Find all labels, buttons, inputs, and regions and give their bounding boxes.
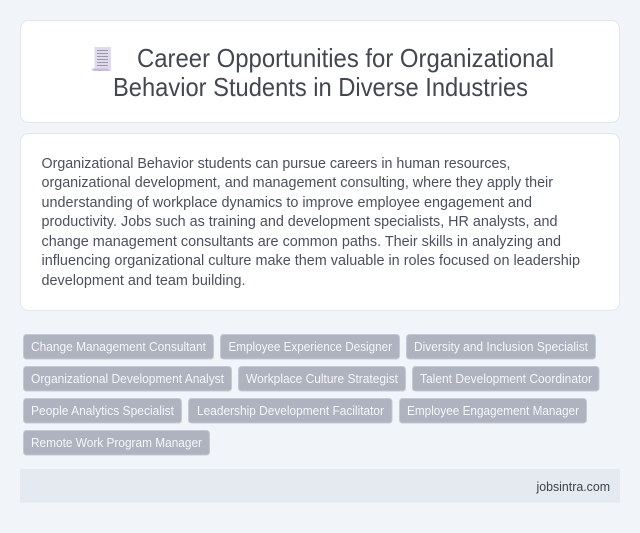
job tags <box>24 334 599 455</box>
description text: influencing organizational culture make them valuable in roles focused on leadership <box>42 253 580 269</box>
tag: Employee Experience Designer <box>220 334 400 359</box>
tag: Diversity and Inclusion Specialist <box>406 334 596 359</box>
tag: Employee Engagement Manager <box>400 398 586 423</box>
tag: Workplace Culture Strategist: Workplace Culture Strategist <box>246 372 398 386</box>
tag: People Analytics Specialist <box>24 398 182 423</box>
footer bar <box>20 469 620 502</box>
description text <box>42 156 580 289</box>
description panel <box>20 134 620 310</box>
tag: Talent Development Coordinator: Talent Development Coordinator <box>420 372 592 386</box>
tag: Change Management Consultant <box>24 334 214 359</box>
title: Career Opportunities for Organizational <box>137 43 554 73</box>
footer source: jobsintra.com <box>536 480 610 494</box>
title <box>113 43 554 102</box>
description text: Organizational Behavior students can pursue careers in human resources, <box>42 156 510 172</box>
tag: Diversity and Inclusion Specialist: Diversity and Inclusion Specialist <box>414 340 588 354</box>
tag: Remote Work Program Manager <box>24 430 210 455</box>
description text: organizational development, and management consulting, where they apply their <box>42 175 553 191</box>
description text: development and team building. <box>42 273 246 289</box>
description text: change management consultants are common paths. Their skills in analyzing and <box>42 234 561 250</box>
tag: Change Management Consultant: Change Management Consultant <box>31 340 206 354</box>
title: Behavior Students in Diverse Industries <box>113 72 528 102</box>
tag: Talent Development Coordinator <box>412 366 599 391</box>
description text: productivity. Jobs such as training and development specialists, HR analysts, and <box>42 214 558 230</box>
tag: Organizational Development Analyst: Organizational Development Analyst <box>31 372 224 386</box>
header panel <box>20 20 620 122</box>
tag: Remote Work Program Manager: Remote Work Program Manager <box>31 436 202 450</box>
tag: Leadership Development Facilitator: Leadership Development Facilitator <box>197 404 384 418</box>
tag: Organizational Development Analyst <box>24 366 232 391</box>
description text: understanding of workplace dynamics to improve employee engagement and <box>42 195 532 211</box>
tag: Leadership Development Facilitator <box>188 398 392 423</box>
tag: People Analytics Specialist: People Analytics Specialist <box>31 404 174 418</box>
tag: Employee Experience Designer: Employee Experience Designer <box>228 340 392 354</box>
icon: paper scroll <box>92 47 112 71</box>
tag: Employee Engagement Manager: Employee Engagement Manager <box>407 404 579 418</box>
tag: Workplace Culture Strategist <box>238 366 406 391</box>
